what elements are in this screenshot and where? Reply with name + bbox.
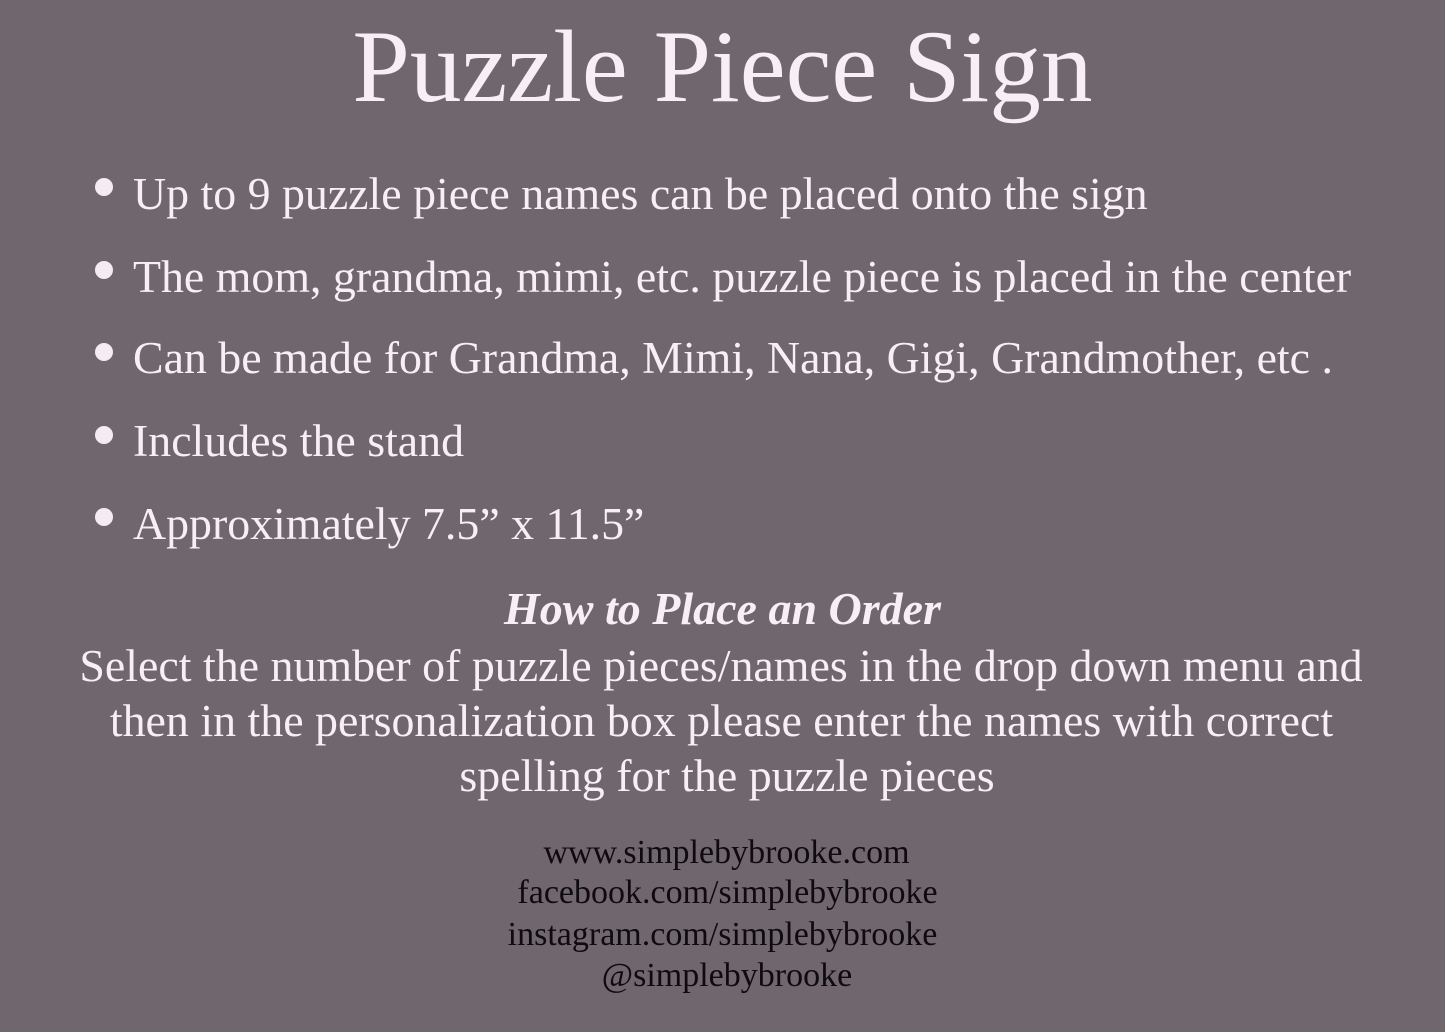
title: Puzzle Piece Sign <box>352 10 1093 124</box>
contact links: @simplebybrooke <box>602 956 852 994</box>
order instructions <box>79 640 1363 801</box>
bullet: center piece: The mom, grandma, mimi, etc. puzzle piece is placed in the center <box>133 250 1351 302</box>
bullet list <box>95 168 1351 548</box>
bullet: sign capacity: Up to 9 puzzle piece names can be placed onto the sign <box>133 168 1148 218</box>
contact links: facebook.com/simplebybrooke <box>517 874 938 911</box>
bullet: stand: Includes the stand <box>133 414 464 466</box>
bullet: dimensions: Approximately 7.5” x 11.5” <box>133 498 644 548</box>
contact links: instagram.com/simplebybrooke <box>508 916 937 953</box>
order instructions: spelling for the puzzle pieces <box>459 750 995 801</box>
order heading: How to Place an Order <box>504 583 941 634</box>
order instructions: Select the number of puzzle pieces/names in the drop down menu and <box>79 640 1363 691</box>
order instructions: then in the personalization box please enter the names with correct <box>110 695 1333 746</box>
contact links: www.simplebybrooke.com <box>543 834 910 870</box>
bullet: recipients: Can be made for Grandma, Mimi, Nana, Gigi, Grandmother, etc . <box>133 332 1333 382</box>
contact links <box>508 834 938 994</box>
